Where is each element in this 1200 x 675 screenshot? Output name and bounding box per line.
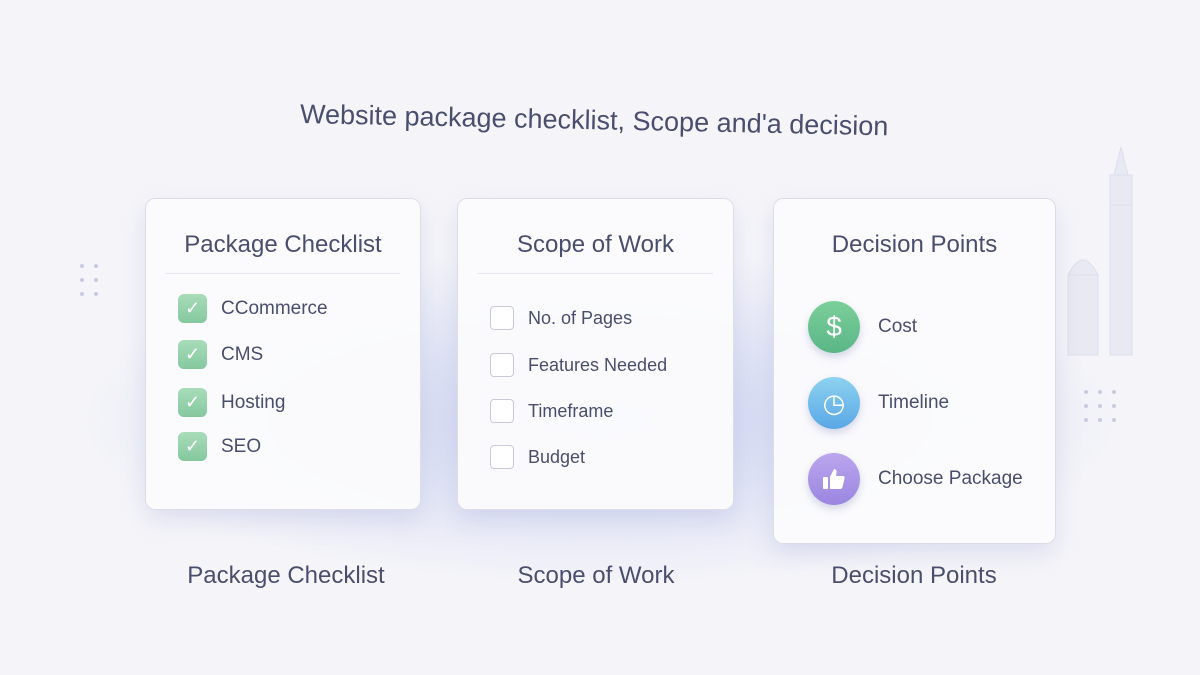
panel: package checklist: Package Checklist bbox=[184, 231, 382, 258]
panel: package checklist bbox=[145, 198, 421, 510]
icon: tower bbox=[1067, 147, 1132, 356]
item: timeline: ◷ bbox=[823, 388, 845, 418]
item: features bbox=[490, 353, 667, 377]
item: features: Features Needed bbox=[528, 354, 667, 374]
item: SEO bbox=[178, 432, 261, 461]
item: budget bbox=[490, 445, 585, 469]
item: cost bbox=[805, 301, 917, 360]
caption: package checklist: Package Checklist bbox=[187, 562, 385, 589]
item: pages bbox=[490, 306, 632, 330]
item: budget: Budget bbox=[528, 446, 585, 466]
item: CCommerce: ✓ bbox=[185, 298, 200, 318]
item: cost: Cost bbox=[878, 316, 917, 337]
item: timeframe: Timeframe bbox=[528, 400, 613, 420]
item: CCommerce: CCommerce bbox=[221, 298, 328, 318]
panel: scope of work: Scope of Work bbox=[517, 231, 674, 258]
item: Hosting bbox=[178, 388, 285, 417]
item: CCommerce bbox=[178, 294, 328, 323]
panel: scope of work bbox=[457, 198, 734, 510]
decorative dots right bbox=[1084, 390, 1116, 422]
item: timeline: Timeline bbox=[878, 392, 949, 413]
caption: scope of work: Scope of Work bbox=[518, 562, 674, 589]
title: Website package checklist, Scope and'a decision bbox=[300, 99, 889, 141]
panel: decision points bbox=[773, 198, 1056, 544]
item: CMS: CMS bbox=[221, 344, 263, 364]
caption: decision points: Decision Points bbox=[831, 562, 997, 589]
item: Hosting: ✓ bbox=[185, 392, 200, 412]
panel: decision points: Decision Points bbox=[832, 231, 997, 258]
item: choose package: Choose Package bbox=[878, 468, 1023, 489]
item: cost: $ bbox=[826, 311, 842, 342]
item: SEO: SEO bbox=[221, 436, 261, 456]
item: Hosting: Hosting bbox=[221, 392, 285, 412]
item: SEO: ✓ bbox=[185, 436, 200, 456]
item: CMS bbox=[178, 340, 263, 369]
item: choose package bbox=[805, 453, 1023, 512]
item: pages: No. of Pages bbox=[528, 308, 632, 328]
item: timeline bbox=[805, 377, 949, 436]
item: timeframe bbox=[490, 399, 613, 423]
decorative dots left bbox=[80, 264, 98, 296]
item: CMS: ✓ bbox=[185, 344, 200, 364]
